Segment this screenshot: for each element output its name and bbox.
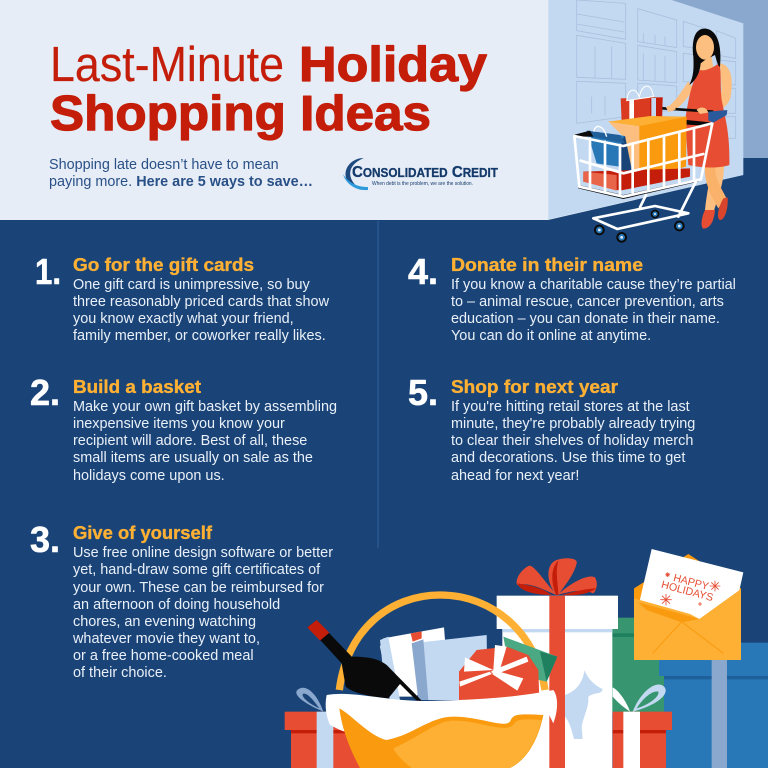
tip 2: gift basket: Build a basket [73, 376, 201, 397]
tip 1: gift cards: One gift card is unimpressive, so buy [73, 277, 310, 293]
tip 4: donate: Donate in their name [451, 254, 643, 275]
tip 1: gift cards: you know exactly what your friend, [73, 311, 294, 327]
illustration: blue gift box [658, 643, 768, 768]
tip 4: donate [408, 251, 736, 344]
tip 3: give of yourself: Use free online design software or better [73, 545, 333, 561]
tip 4: donate: education – you can donate in their name. [451, 311, 720, 327]
illustration: shopping cart with gifts [573, 86, 727, 243]
tip 1: gift cards [35, 251, 330, 344]
tip 2: gift basket: holidays come upon us. [73, 468, 225, 484]
tip 4: donate: 4. [408, 251, 438, 292]
title: Holiday [299, 38, 487, 92]
tip 5: next year: If you're hitting retail stores at the last [451, 399, 690, 415]
illustration: white gift box with red bow and dog [497, 558, 618, 768]
tip 2: gift basket: 2. [30, 372, 60, 413]
tip 4: donate: to – animal rescue, cancer prevention, arts [451, 294, 724, 310]
title [50, 38, 487, 141]
tip 3: give of yourself: chores, an evening watching [73, 614, 256, 630]
tip 5: next year: and decorations. Use this time to get [451, 450, 685, 466]
tip 5: next year: to clear their shelves of holiday merch [451, 433, 693, 449]
tip 1: gift cards: three reasonably priced cards that show [73, 294, 330, 310]
tip 1: gift cards: Go for the gift cards [73, 254, 254, 275]
tip 1: gift cards: family member, or coworker really likes. [73, 328, 326, 344]
tip 5: next year: minute, they're probably already trying [451, 416, 695, 432]
illustration: envelope with Happy Holidays card [634, 549, 743, 660]
tip 2: gift basket [30, 372, 337, 484]
tip 1: gift cards: 1. [35, 251, 61, 292]
intro text [49, 157, 313, 190]
illustration: envelope with Happy Holidays card: HOLIDAYS [660, 579, 714, 604]
tip 3: give of yourself: your own. These can be reimbursed for [73, 580, 324, 596]
tip 2: gift basket: Make your own gift basket by assembling [73, 399, 337, 415]
illustration: envelope with Happy Holidays card: HAPPY [672, 572, 710, 593]
tip 3: give of yourself: 3. [30, 519, 60, 560]
tip 3: give of yourself: Give of yourself [73, 522, 213, 543]
header panel [0, 0, 768, 221]
illustration: shopper woman [668, 29, 732, 229]
tip 3: give of yourself [30, 519, 333, 681]
tip 5: next year: Shop for next year [451, 376, 618, 397]
tip 5: next year: ahead for next year! [451, 468, 579, 484]
tip 3: give of yourself: of their choice. [73, 665, 167, 681]
tip 4: donate: If you know a charitable cause they’re partial [451, 277, 736, 293]
intro text: paying more. Here are 5 ways to save… [49, 174, 313, 190]
logo: Consolidated Credit: When debt is the problem, we are the solution. [372, 181, 473, 187]
title: Last-Minute [50, 38, 284, 92]
illustration: store wall with shelves [548, 0, 743, 219]
tip 3: give of yourself: an afternoon of doing household [73, 597, 280, 613]
tip 3: give of yourself: whatever movie they want to, [72, 631, 260, 647]
tip 4: donate: You can do it online at anytime. [451, 328, 651, 344]
tip 5: next year [408, 372, 695, 484]
tip 2: gift basket: small items are usually on sale as the [73, 450, 313, 466]
intro text: Shopping late doesn’t have to mean [49, 157, 279, 173]
tip 2: gift basket: recipient will adore. Best of all, these [73, 433, 307, 449]
tip 3: give of yourself: or a free home-cooked meal [73, 648, 254, 664]
illustration: left red gift box [285, 688, 361, 768]
illustration: green gift box [610, 618, 664, 713]
logo: Consolidated Credit: CONSOLIDATED CREDIT [352, 164, 498, 181]
tip 5: next year: 5. [408, 372, 438, 413]
divider [378, 221, 379, 548]
tip 3: give of yourself: yet, hand-draw some gift certificates of [73, 562, 321, 578]
logo: Consolidated Credit [343, 158, 498, 190]
illustration: gift basket [307, 595, 557, 768]
title: Shopping Ideas [50, 87, 431, 141]
illustration: right red gift box [613, 685, 672, 768]
tip 2: gift basket: inexpensive items you know your [73, 416, 285, 432]
